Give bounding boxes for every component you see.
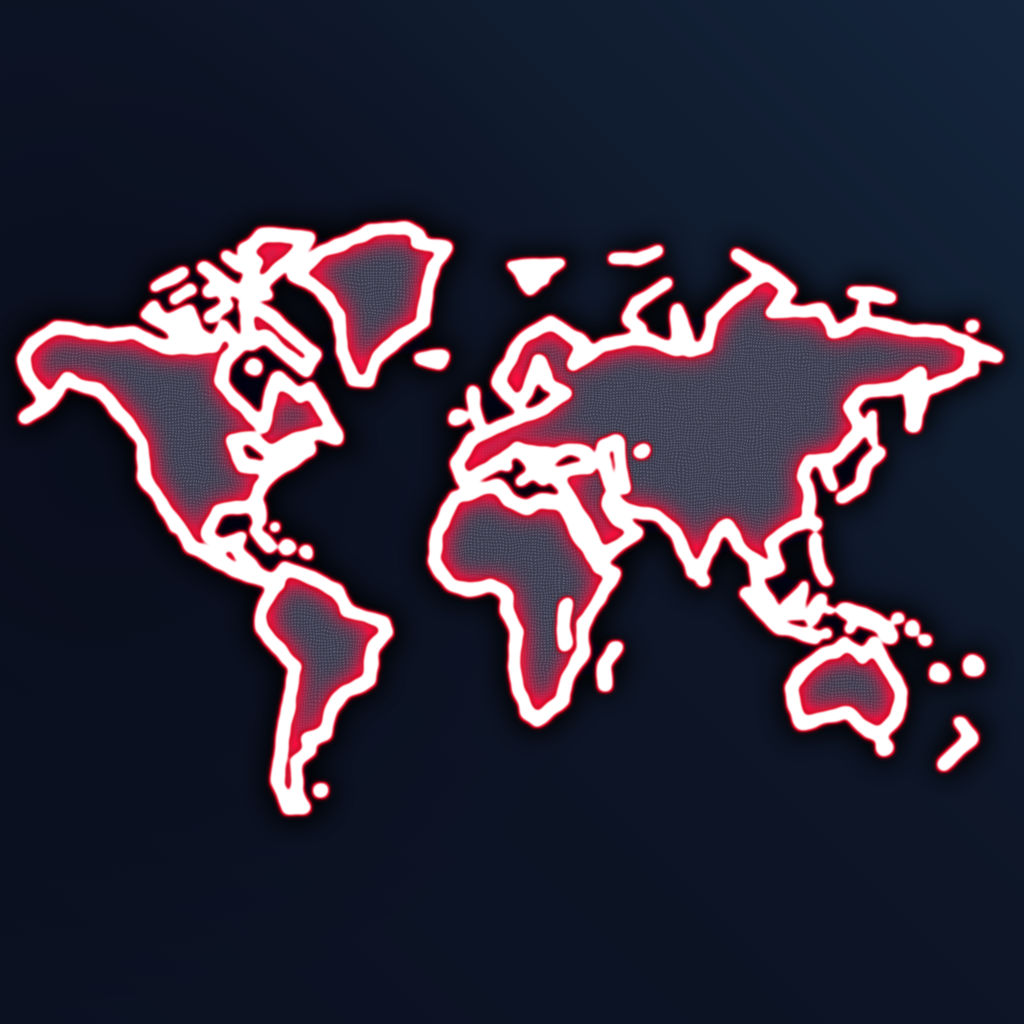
East Africa lake arc: [563, 605, 567, 645]
island arcs and peninsulas: [155, 250, 972, 765]
Madagascar: [605, 648, 615, 685]
Eurasia: [457, 255, 997, 573]
British Isles: [472, 393, 478, 422]
Kamchatka peninsula: [912, 375, 920, 425]
Novaya Zemlya: [628, 283, 668, 328]
Sakhalin: [872, 415, 873, 442]
South America: [260, 568, 387, 810]
Korea: [823, 465, 832, 485]
Caribbean arc: [255, 530, 270, 547]
Baffin Island: [245, 305, 315, 370]
Sulawesi: [812, 600, 820, 620]
Ellesmere Island: [243, 235, 310, 283]
Japan: [842, 453, 880, 498]
round island dots: [202, 274, 984, 798]
Sumatra and Java: [745, 592, 815, 637]
Malay Peninsula: [755, 565, 772, 615]
neon outlines of the world map: [23, 228, 997, 810]
Greenland: [293, 228, 447, 383]
solid white islands: [145, 263, 805, 615]
Philippines: [815, 540, 826, 580]
Baja California: [163, 503, 173, 530]
Australia: [792, 643, 902, 735]
Caspian Sea: [603, 440, 625, 488]
Borneo: [785, 585, 805, 615]
Italy and Greece: [517, 447, 555, 482]
New Siberian Islands: [853, 292, 890, 297]
dotted grey land fill with inner red glow: [23, 228, 997, 810]
Franz Josef Land: [615, 250, 658, 260]
Africa: [433, 485, 615, 720]
North America: [23, 327, 338, 584]
Svalbard: [513, 263, 560, 290]
map drop shadow: [23, 228, 997, 810]
Iceland: [418, 355, 445, 365]
New Guinea: [845, 610, 890, 636]
Victoria Island: [145, 305, 200, 335]
Arctic Canada lines: [155, 255, 267, 338]
New Zealand: [943, 723, 972, 765]
